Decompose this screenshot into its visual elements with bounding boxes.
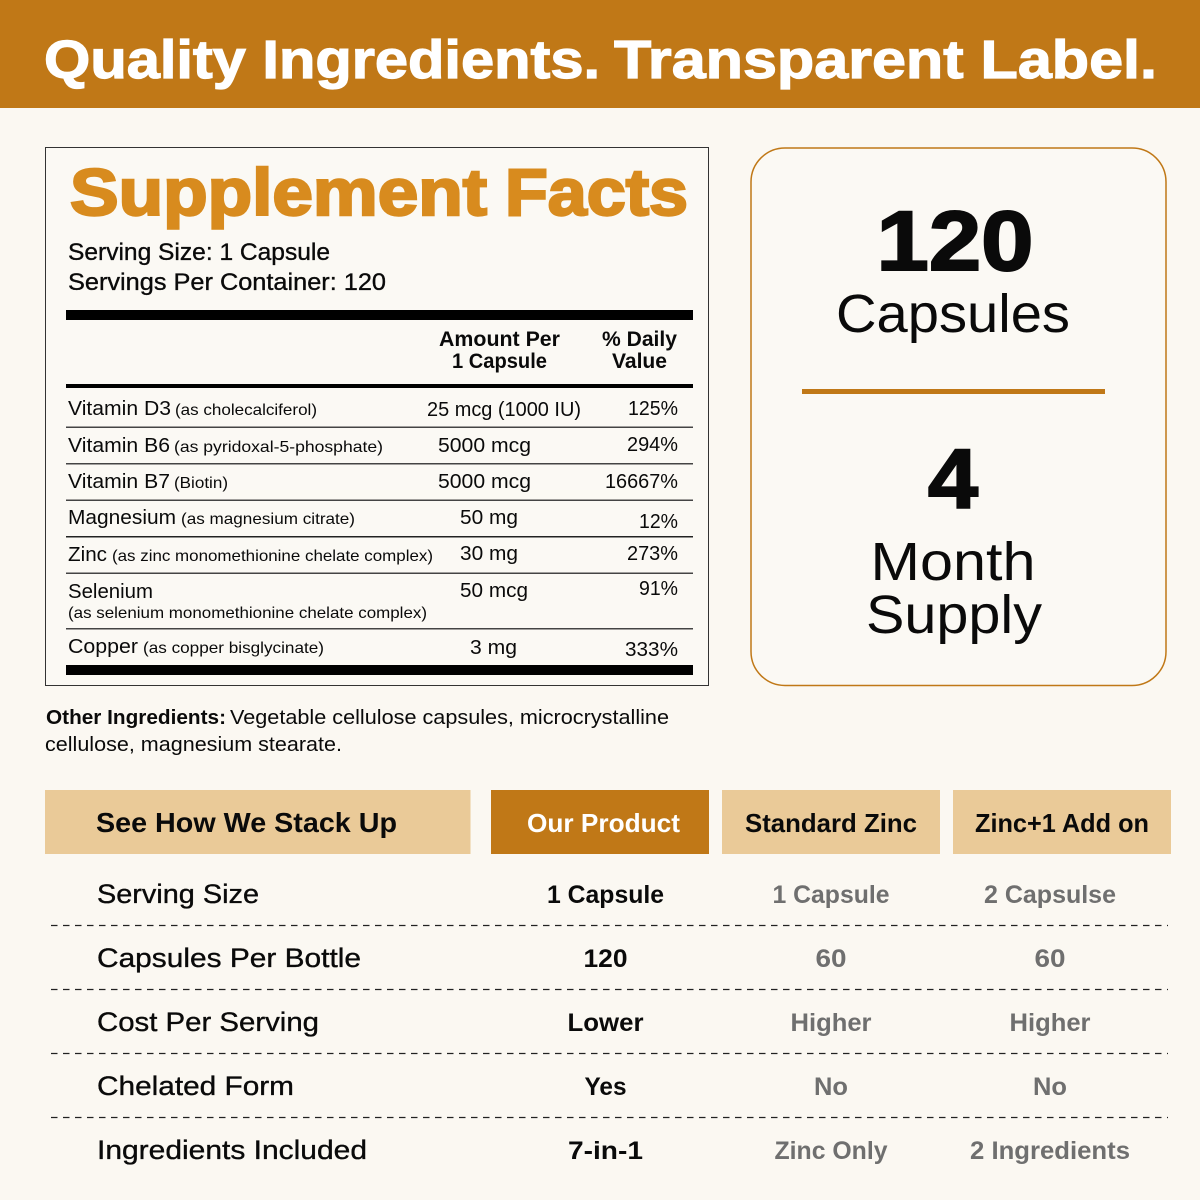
- row: vitamin d3: 25 mcg (1000 IU): [427, 399, 581, 421]
- row: vitamin b6: Vitamin B6: [68, 435, 170, 457]
- other ingredients text: Other Ingredients:: [46, 706, 226, 729]
- row: vitamin d3: 125%: [628, 398, 678, 420]
- label: month supply: [866, 532, 1042, 645]
- other ingredients text: cellulose, magnesium stearate.: [45, 733, 342, 756]
- row: chelated form: [97, 1071, 1067, 1101]
- row: copper: Copper: [68, 636, 138, 658]
- stat: 4: 4: [928, 432, 978, 526]
- row: magnesium: (as magnesium citrate): [181, 511, 355, 528]
- row: cost per serving: Cost Per Serving: [97, 1007, 319, 1037]
- header: our product: Our Product: [527, 808, 680, 838]
- row: vitamin b7: [68, 471, 678, 493]
- row: cost per serving: Higher: [1010, 1009, 1091, 1037]
- row: serving size: 2 Capsulse: [984, 881, 1116, 909]
- row: ingredients included: Ingredients Included: [97, 1135, 367, 1165]
- row: selenium: [68, 578, 678, 622]
- row: capsules per bottle: 60: [1034, 945, 1066, 973]
- row: vitamin d3: [68, 398, 678, 421]
- header: zinc+1 add on: [953, 790, 1171, 854]
- row: selenium: 91%: [639, 578, 678, 600]
- row: ingredients included: 7-in-1: [568, 1137, 643, 1165]
- row: selenium: Selenium: [68, 581, 153, 603]
- row: capsules per bottle: [97, 943, 1066, 973]
- table column headers: % Daily: [602, 328, 677, 351]
- row: zinc: [68, 543, 678, 566]
- row: vitamin b6: [68, 434, 678, 457]
- row: ingredients included: Zinc Only: [774, 1137, 888, 1165]
- serving information: Servings Per Container: 120: [68, 269, 386, 296]
- row: vitamin b6: 294%: [627, 434, 678, 456]
- panel: capsule count and supply: [751, 148, 1166, 686]
- row: cost per serving: [97, 1007, 1091, 1037]
- comparison table: [45, 790, 1171, 1165]
- header: see how we stack up: See How We Stack Up: [96, 807, 397, 838]
- header: our product: [491, 790, 709, 854]
- row dividers: [51, 926, 1168, 1118]
- row: capsules per bottle: 120: [584, 945, 628, 973]
- row: capsules per bottle: 60: [816, 945, 846, 973]
- row: magnesium: Magnesium: [68, 507, 176, 529]
- row: vitamin b6: 5000 mcg: [438, 435, 531, 457]
- row: vitamin b7: 16667%: [605, 471, 678, 493]
- row: copper: 3 mg: [470, 637, 517, 659]
- row: zinc: 30 mg: [460, 543, 518, 565]
- row: chelated form: Yes: [584, 1073, 626, 1101]
- serving information: [68, 239, 386, 296]
- row: copper: [68, 636, 678, 661]
- row: magnesium: [68, 507, 678, 533]
- row: vitamin b7: 5000 mcg: [438, 471, 531, 493]
- header: zinc+1 add on: Zinc+1 Add on: [975, 808, 1149, 838]
- table column headers: 1 Capsule: [452, 350, 547, 373]
- row: serving size: 1 Capsule: [772, 881, 890, 909]
- row: ingredients included: [97, 1135, 1130, 1165]
- row: zinc: Zinc: [68, 544, 107, 566]
- serving information: Serving Size: 1 Capsule: [68, 239, 330, 266]
- title: Transparent Label.: [614, 30, 1157, 90]
- panel: supplement facts: [46, 148, 708, 686]
- row: vitamin b7: Vitamin B7: [68, 471, 170, 493]
- row: chelated form: No: [814, 1073, 848, 1101]
- divider: [802, 389, 1105, 394]
- other ingredients text: [45, 706, 669, 756]
- label: month supply: Month: [870, 532, 1036, 592]
- row: serving size: [97, 879, 1116, 909]
- row: cost per serving: Lower: [568, 1009, 644, 1037]
- header: standard zinc: Standard Zinc: [745, 808, 917, 838]
- row: chelated form: Chelated Form: [97, 1071, 294, 1101]
- row: copper: (as copper bisglycinate): [143, 640, 324, 657]
- row: ingredients included: 2 Ingredients: [970, 1137, 1130, 1165]
- label: month supply: Supply: [866, 585, 1042, 645]
- header banner: [0, 0, 1200, 108]
- row: magnesium: 12%: [639, 511, 678, 533]
- heading: supplement facts: Supplement: [70, 155, 487, 229]
- row: selenium: 50 mcg: [460, 580, 528, 602]
- other ingredients text: Vegetable cellulose capsules, microcrystalline: [230, 706, 669, 729]
- heading: supplement facts: Facts: [505, 155, 688, 229]
- header: standard zinc: [722, 790, 940, 854]
- row: serving size: 1 Capsule: [547, 881, 664, 909]
- table column headers: Value: [612, 350, 667, 373]
- table column headers: Amount Per: [439, 328, 560, 351]
- row: selenium: (as selenium monomethionine chelate complex): [68, 605, 427, 622]
- row: chelated form: No: [1033, 1073, 1067, 1101]
- table column headers: [439, 328, 677, 373]
- row: zinc: (as zinc monomethionine chelate complex): [112, 548, 433, 565]
- header: see how we stack up: [45, 790, 470, 854]
- row: vitamin b7: (Biotin): [174, 475, 228, 492]
- row: zinc: 273%: [627, 543, 678, 565]
- label: capsules: Capsules: [836, 284, 1070, 344]
- stat: 120: 120: [876, 194, 1034, 288]
- row: cost per serving: Higher: [790, 1009, 872, 1037]
- title: Quality Ingredients.: [44, 30, 600, 90]
- row: vitamin d3: (as cholecalciferol): [175, 402, 317, 419]
- row: capsules per bottle: Capsules Per Bottle: [97, 943, 361, 973]
- row: magnesium: 50 mg: [460, 507, 518, 529]
- row: vitamin d3: Vitamin D3: [68, 398, 171, 420]
- table rules: [66, 310, 693, 675]
- row: serving size: Serving Size: [97, 879, 259, 909]
- row: copper: 333%: [625, 639, 678, 661]
- row: vitamin b6: (as pyridoxal-5-phosphate): [174, 439, 383, 456]
